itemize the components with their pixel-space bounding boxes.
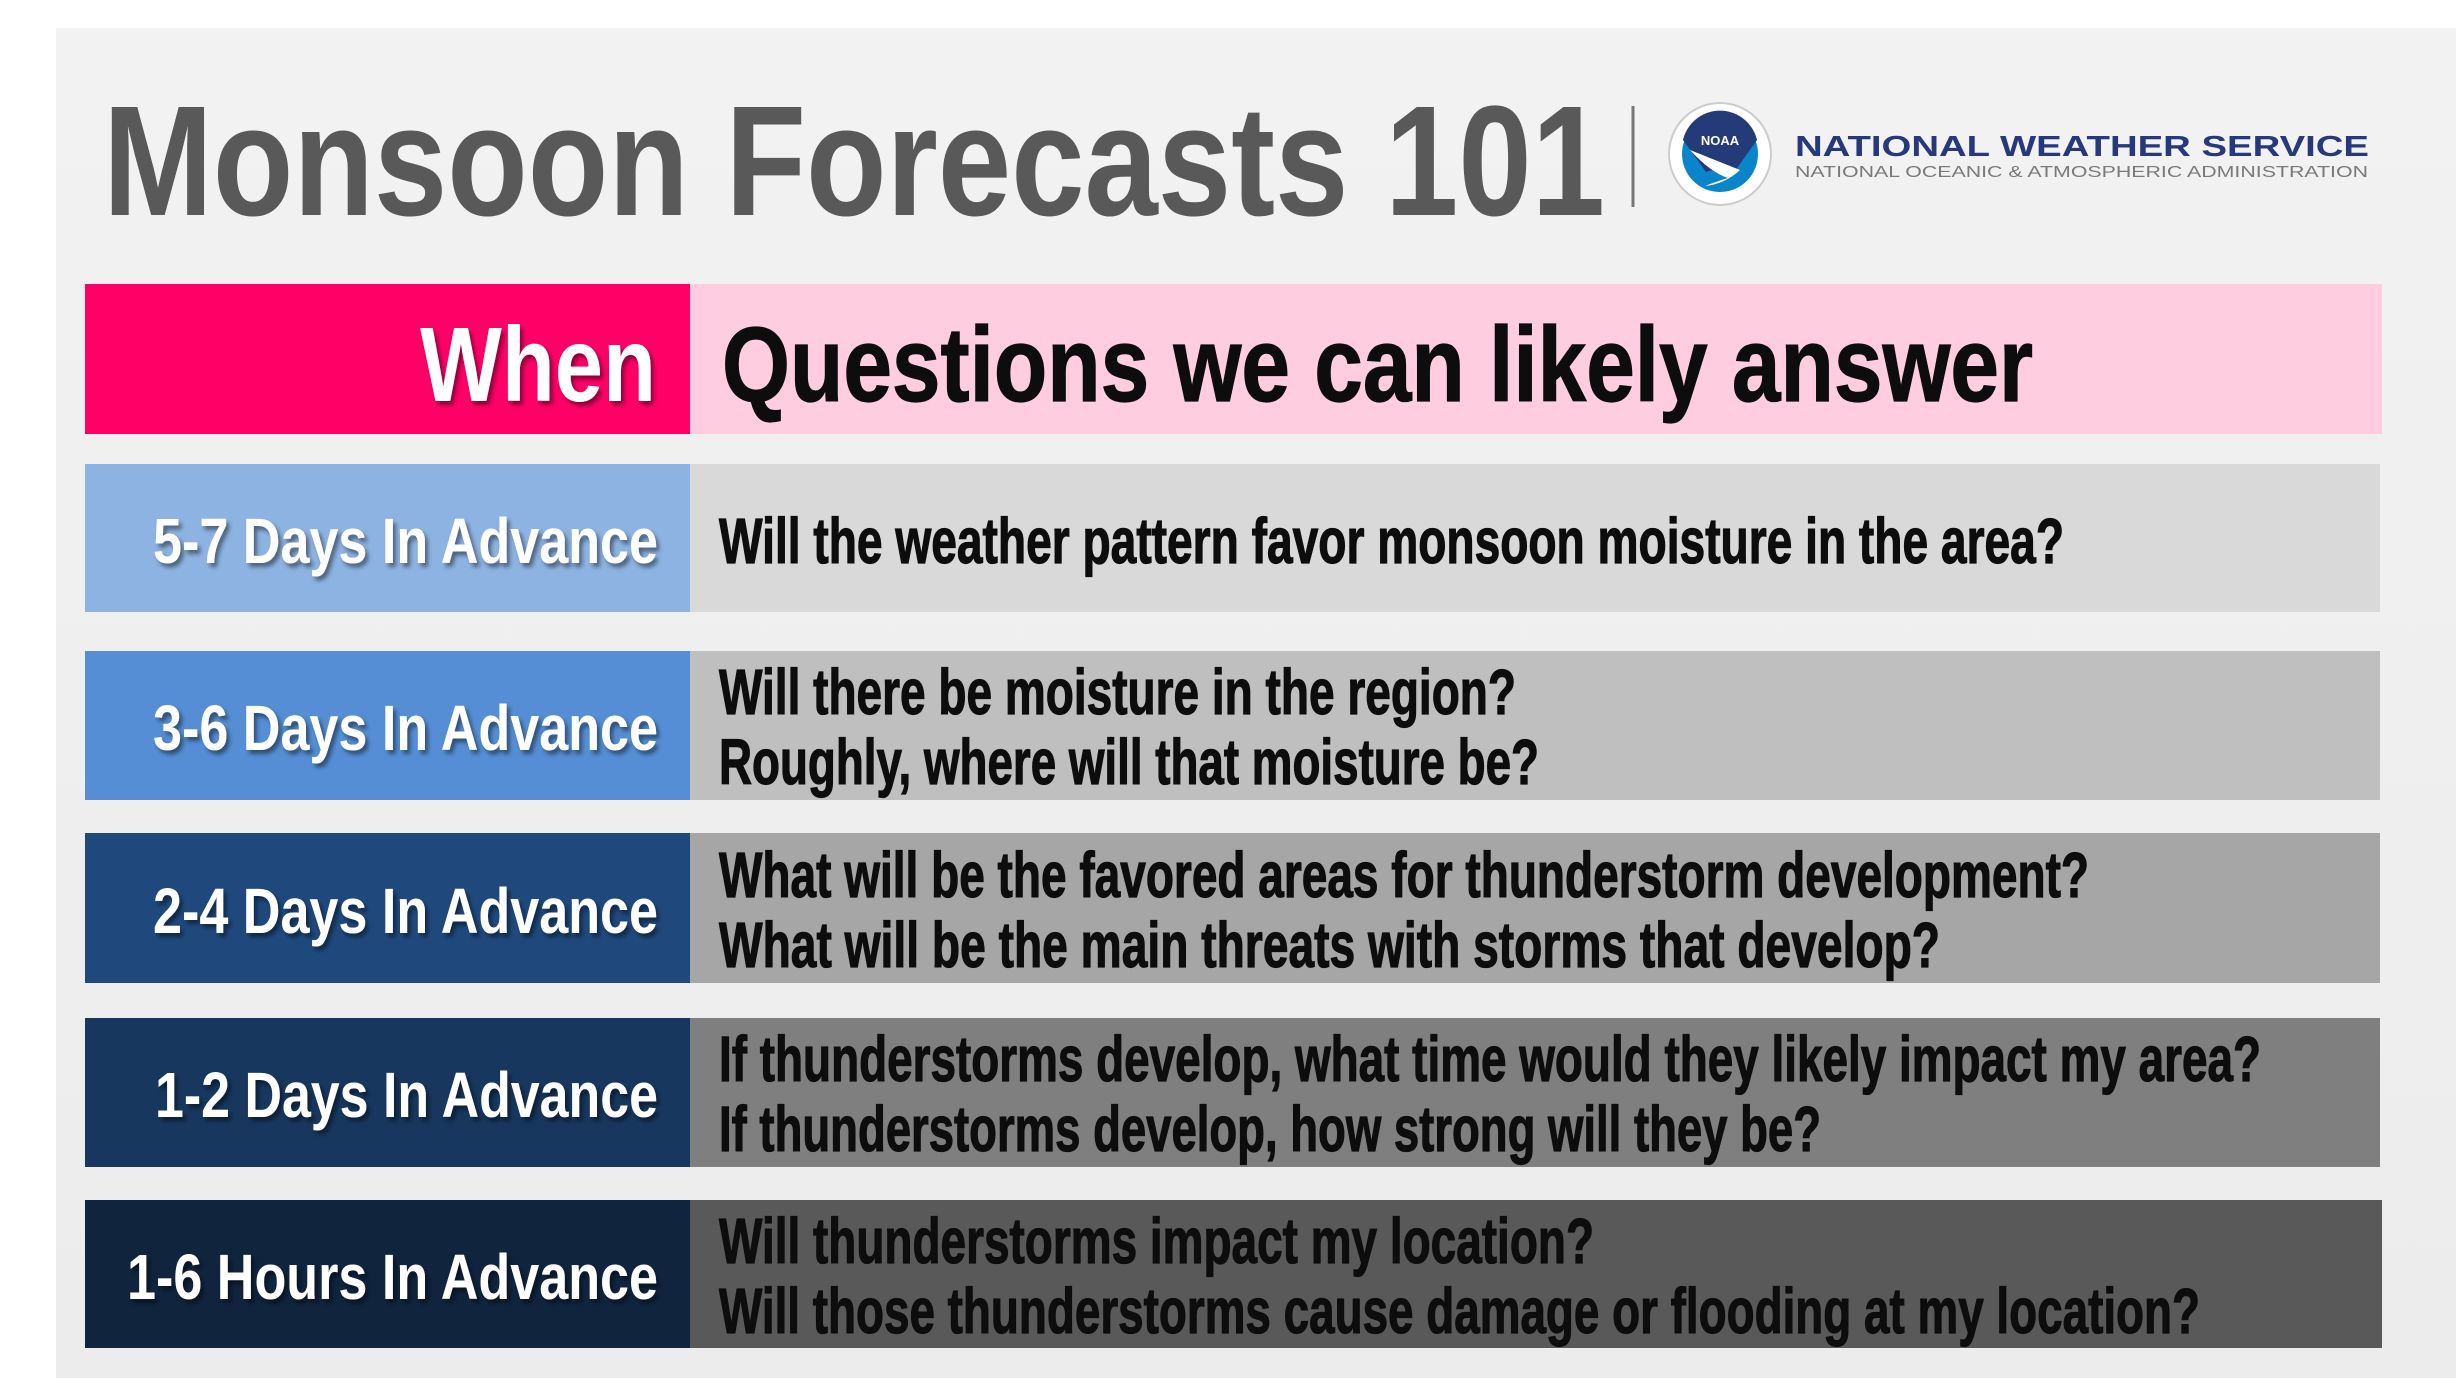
row: 2-4 days: What will be the main threats with storms that develop? xyxy=(719,909,1940,981)
row: 2-4 days: 2-4 Days In Advance xyxy=(153,875,658,947)
logo text: National Weather Service: NATIONAL OCEANIC & ATMOSPHERIC ADMINISTRATION xyxy=(1795,164,2368,181)
logo: NOAA xyxy=(1669,103,1771,205)
row: 1-6 hours: Will thunderstorms impact my location? xyxy=(719,1205,1594,1277)
row: 3-6 days: Roughly, where will that moisture be? xyxy=(719,726,1539,798)
logo text: National Weather Service xyxy=(1795,131,2369,181)
row: 2-4 days xyxy=(85,833,2380,983)
row: 1-2 days: If thunderstorms develop, how strong will they be? xyxy=(719,1093,1821,1165)
row: 1-2 days xyxy=(85,1018,2380,1167)
row: 1-6 hours xyxy=(85,1200,2382,1348)
logo text: National Weather Service: NATIONAL WEATHER SERVICE xyxy=(1795,131,2369,163)
row: 3-6 days: 3-6 Days In Advance xyxy=(153,692,658,764)
header row: When xyxy=(420,306,656,424)
header row: Questions we can likely answer xyxy=(722,306,2033,424)
title: Monsoon Forecasts 101 xyxy=(103,74,1605,249)
header row xyxy=(85,284,2382,434)
row: 3-6 days: Will there be moisture in the region? xyxy=(719,656,1516,728)
row: 1-2 days: 1-2 Days In Advance xyxy=(155,1059,658,1131)
row: 3-6 days xyxy=(85,651,2380,800)
row: 5-7 days: 5-7 Days In Advance xyxy=(153,505,658,577)
row: 1-6 hours: 1-6 Hours In Advance xyxy=(127,1241,658,1313)
logo: NOAA: NOAA xyxy=(1701,133,1740,148)
row: 5-7 days xyxy=(85,464,2380,612)
